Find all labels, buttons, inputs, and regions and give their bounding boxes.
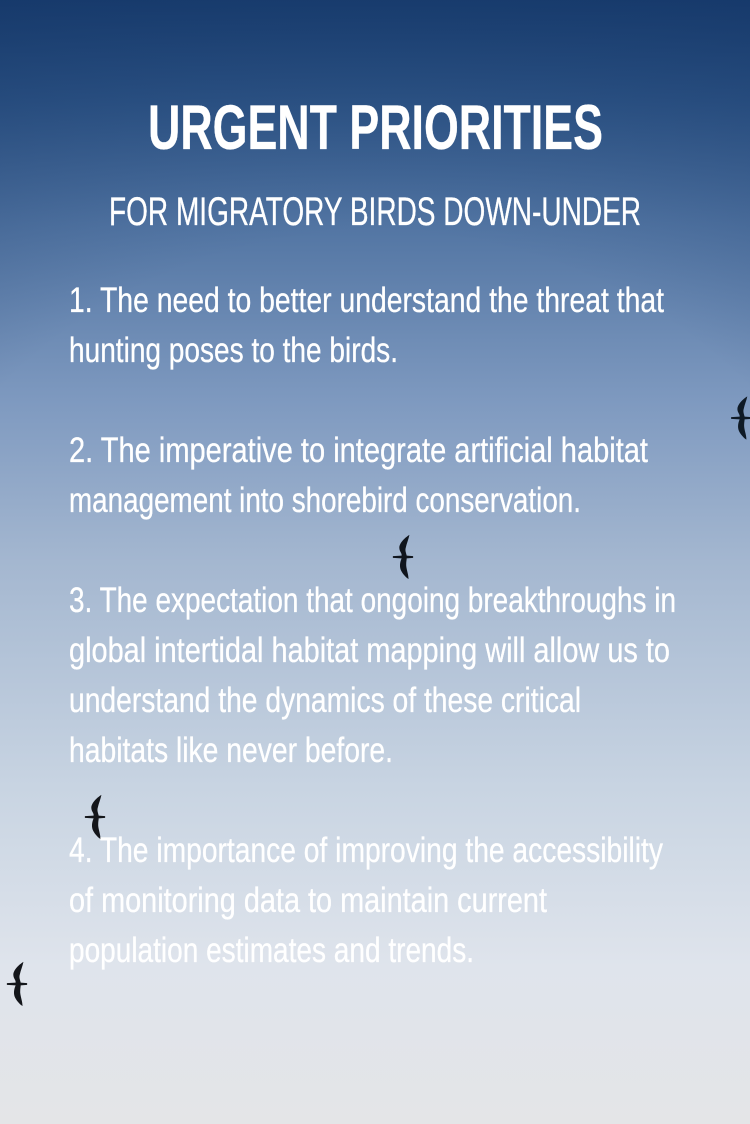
text block: priority 4: of monitoring data to maintain current: [69, 881, 547, 920]
text block: priority 3: habitats like never before.: [69, 731, 393, 770]
text block: priority 3: understand the dynamics of these critical: [69, 681, 581, 720]
text block: priority 4: [69, 831, 663, 970]
text block: priority 1: hunting poses to the birds.: [69, 331, 398, 370]
text block: priority 2: management into shorebird conservation.: [69, 481, 581, 520]
icon: bird centre: [393, 535, 413, 579]
text block: priority 2: [69, 431, 648, 520]
text block: priority 2: 2. The imperative to integrate artificial habitat: [69, 431, 648, 470]
text block: priority 3: [69, 581, 676, 770]
icon: bird right edge: [731, 396, 750, 440]
text block: priority 4: population estimates and trends.: [69, 931, 474, 970]
icon: bird lower left: [7, 962, 27, 1006]
icon: bird left over item four: [85, 795, 105, 839]
text block: priority 1: [69, 281, 664, 370]
